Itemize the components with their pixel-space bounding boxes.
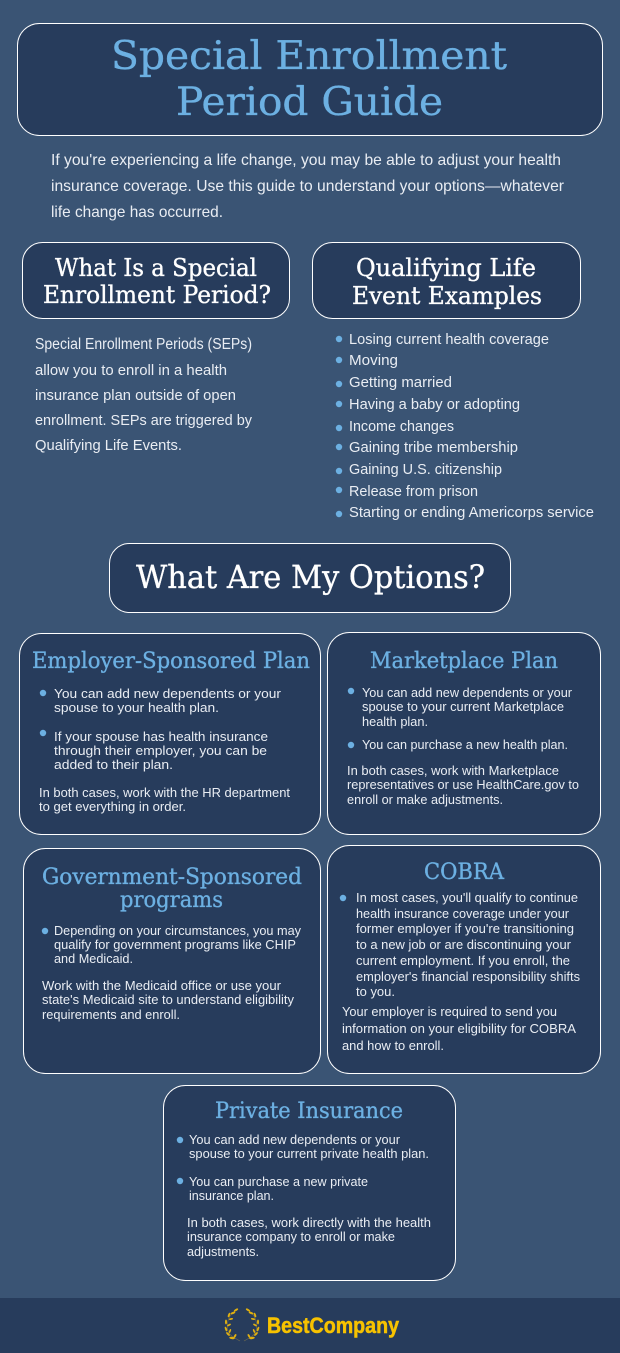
heading: what is a special enrollment period [22, 242, 290, 318]
icon: laurel wreath [224, 1308, 260, 1341]
text: SEP definition [35, 336, 253, 454]
bullet text: COBRA option: former employer if you're transitioning [356, 921, 574, 936]
bullet text: employer options: spouse to your health plan. [54, 700, 219, 715]
bullet text: private options: You can add new dependents or your [189, 1132, 401, 1147]
list: qualifying life events: Release from prison [349, 484, 478, 500]
bullet text: private options [177, 1132, 429, 1203]
text: SEP definition: insurance plan outside of open [35, 388, 236, 404]
bullet text: private options: insurance plan. [189, 1188, 274, 1203]
bullet text: government options: and Medicaid. [54, 951, 133, 966]
intro text: insurance coverage. Use this guide to understand your options—whatever [51, 178, 564, 195]
note: employer next step [39, 785, 290, 814]
note: government next step [42, 978, 294, 1022]
list: qualifying life events: Moving [349, 353, 398, 369]
note: employer next step: to get everything in order. [39, 799, 186, 814]
text: SEP definition: Qualifying Life Events. [35, 438, 182, 454]
bullet text: marketplace options: spouse to your current Marketplace [362, 699, 564, 714]
bullet text: COBRA option: to you. [356, 984, 395, 999]
intro text: If you're experiencing a life change, you may be able to adjust your health [51, 152, 561, 169]
panel: COBRA [328, 846, 600, 1074]
list: qualifying life events: Starting or ending Americorps service [349, 505, 594, 521]
note: private next step [187, 1215, 431, 1259]
heading: what are my options [110, 544, 510, 612]
intro text: life change has occurred. [51, 204, 223, 221]
note: COBRA next step: information on your eligibility for COBRA [342, 1021, 576, 1036]
text: SEP definition: Special Enrollment Periods (SEPs) [35, 336, 252, 353]
bullet text: COBRA option [340, 890, 580, 999]
bullet text: marketplace options: health plan. [362, 714, 428, 729]
list: qualifying life events [336, 332, 594, 521]
list: qualifying life events: Gaining tribe membership [349, 440, 518, 456]
bullet text: employer options: added to their plan. [54, 757, 173, 772]
title banner [18, 24, 602, 136]
bullet text: employer options [40, 686, 282, 772]
heading: qualifying life event examples: Event Examples [352, 282, 542, 310]
panel: employer-sponsored plan [20, 634, 320, 834]
bullet text: employer options: You can add new dependents or your [54, 686, 282, 701]
text: SEP definition: allow you to enroll in a health [35, 363, 227, 379]
heading: what is a special enrollment period: Enrollment Period? [43, 281, 271, 309]
panel: marketplace plan [328, 632, 600, 834]
panel: private insurance [164, 1086, 456, 1280]
bullet text: COBRA option: health insurance coverage under your [356, 906, 570, 921]
note: COBRA next step: Your employer is required to send you [342, 1004, 557, 1019]
heading: what is a special enrollment period: What Is a Special [55, 254, 257, 282]
bullet text: private options: You can purchase a new private [189, 1174, 368, 1189]
note: private next step: In both cases, work directly with the health [187, 1215, 431, 1230]
panel heading: private insurance: Private Insurance [215, 1099, 403, 1124]
bullet text: COBRA option: to a new job or are discontinuing your [356, 937, 572, 952]
bullet text: private options: spouse to your current private health plan. [189, 1146, 429, 1161]
list: qualifying life events: Losing current health coverage [349, 332, 549, 348]
heading: qualifying life event examples [312, 242, 580, 318]
note: marketplace next step [347, 763, 579, 807]
bullet text: government options: Depending on your circumstances, you may [54, 923, 301, 938]
note: government next step: Work with the Medicaid office or use your [42, 978, 282, 993]
note: government next step: state's Medicaid site to understand eligibility [42, 992, 294, 1007]
note: employer next step: In both cases, work with the HR department [39, 785, 290, 800]
bullet text: employer options: If your spouse has health insurance [54, 729, 268, 744]
bullet text: COBRA option: In most cases, you'll qualify to continue [356, 890, 578, 905]
intro text [51, 152, 564, 221]
list: qualifying life events: Gaining U.S. citizenship [349, 462, 502, 478]
note: government next step: requirements and enroll. [42, 1007, 180, 1022]
bullet text: employer options: through their employer, you can be [54, 743, 267, 758]
list: qualifying life events: Income changes [349, 419, 454, 435]
bullet text: COBRA option: current employment. If you enroll, the [356, 953, 570, 968]
title banner: Special Enrollment [111, 34, 507, 79]
bullet text: government options [42, 923, 301, 966]
heading: qualifying life event examples: Qualifying Life [356, 254, 536, 282]
bullet text: government options: qualify for government programs like CHIP [54, 937, 296, 952]
panel heading: government-sponsored programs [42, 865, 302, 913]
footer band [0, 1298, 620, 1353]
logo wordmark: BestCompany [267, 1313, 400, 1338]
bullet text: COBRA option: employer's financial responsibility shifts [356, 969, 580, 984]
note: private next step: insurance company to enroll or make [187, 1229, 395, 1244]
bullet text: marketplace options: You can purchase a new health plan. [362, 737, 568, 752]
note: marketplace next step: enroll or make adjustments. [347, 792, 503, 807]
bullet text: marketplace options: You can add new dependents or your [362, 685, 573, 700]
panel heading: marketplace plan: Marketplace Plan [370, 649, 558, 674]
text: SEP definition: enrollment. SEPs are triggered by [35, 413, 253, 429]
bullet text: marketplace options [348, 685, 573, 752]
panel heading: employer-sponsored plan: Employer-Sponsored Plan [32, 649, 310, 674]
note: private next step: adjustments. [187, 1244, 259, 1259]
panel: government-sponsored programs [24, 848, 320, 1074]
heading: what are my options: What Are My Options? [136, 558, 485, 596]
list: qualifying life events: Getting married [349, 375, 452, 391]
panel heading: government-sponsored programs: Government-Sponsored [42, 865, 302, 890]
list: qualifying life events: Having a baby or adopting [349, 397, 520, 413]
panel heading: government-sponsored programs: programs [120, 888, 223, 913]
note: marketplace next step: In both cases, work with Marketplace [347, 763, 559, 778]
title banner: Period Guide [176, 80, 443, 125]
note: marketplace next step: representatives or use HealthCare.gov to [347, 777, 579, 792]
panel heading: COBRA: COBRA [424, 860, 505, 885]
note: COBRA next step: and how to enroll. [342, 1038, 444, 1053]
note: COBRA next step [342, 1004, 576, 1053]
